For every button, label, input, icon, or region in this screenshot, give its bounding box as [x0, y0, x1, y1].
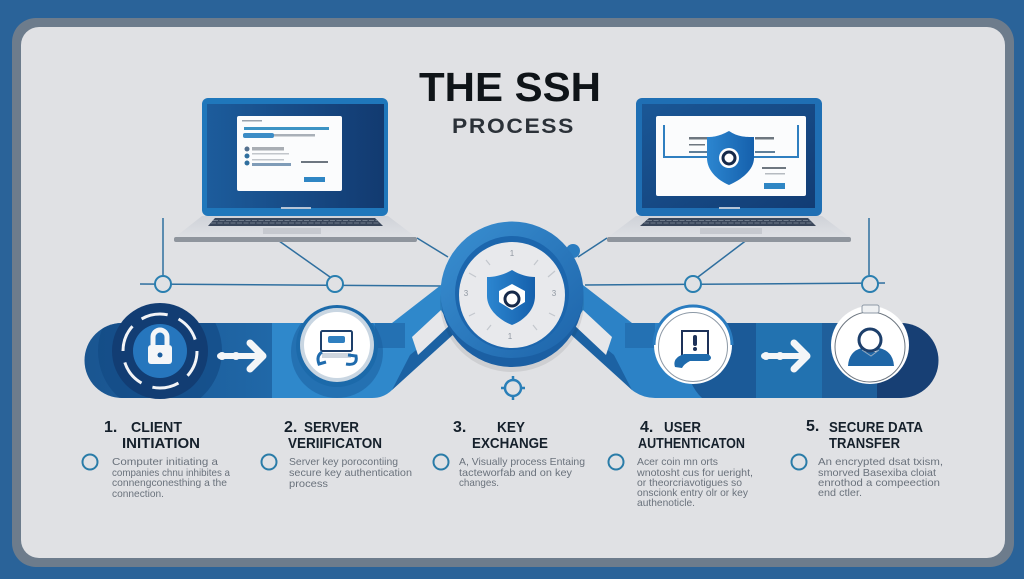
step 1 text: 1.: [104, 419, 117, 436]
connector nodes: [155, 276, 878, 292]
title: THE SSH: [419, 64, 601, 110]
step 1 icon: padlock: [112, 303, 208, 399]
step 3 text: 3.: [453, 419, 466, 436]
step 4 icon: alert badge: [654, 306, 732, 384]
step 4 text: authenoticle.: [637, 497, 695, 509]
central clock: 1: [510, 249, 515, 258]
step 2 text: [262, 419, 412, 490]
icon: arrow: [764, 343, 807, 369]
step 3 text: changes.: [459, 477, 499, 489]
step 4 text: onscionk entry olr or key: [637, 487, 749, 499]
central clock: 1: [508, 332, 513, 341]
step 4 text: AUTHENTICATON: [638, 435, 745, 452]
step 1 text: connection.: [112, 488, 164, 500]
step 5 text: TRANSFER: [829, 435, 900, 452]
step 5 text: smorved Basexiba cloiat: [818, 467, 936, 479]
step 1 text: INITIATION: [122, 435, 200, 452]
step 3 text: [434, 419, 585, 489]
central arms: [392, 310, 632, 390]
security dialog: [656, 116, 806, 196]
step 4 text: or theorcriavotigues so: [637, 477, 742, 489]
central clock: [440, 222, 584, 372]
step 4 text: [608, 419, 753, 509]
icon: arrow: [220, 343, 263, 369]
right process bar: [570, 285, 938, 398]
step 4 text: wnotosht cus for ueright,: [636, 467, 753, 479]
step 1 text: companies chnu inhibites a: [112, 467, 230, 479]
lower node: [501, 376, 525, 400]
step 3 text: KEY: [497, 419, 525, 436]
title: [419, 64, 601, 138]
step 1 text: connengconesthing a the: [112, 477, 227, 489]
right laptop: [607, 98, 851, 242]
step 1 text: Computer initiating a: [112, 456, 218, 468]
step 2 text: VERIIFICATON: [288, 435, 382, 452]
step 4 text: Acer coin mn orts: [637, 456, 718, 468]
step 3 text: EXCHANGE: [472, 435, 548, 452]
step 5 text: [792, 418, 943, 499]
step 5 text: An encrypted dsat txism,: [818, 456, 943, 468]
step 5 text: SECURE DATA: [829, 419, 923, 436]
step 3 text: tacteworfab and on key: [459, 467, 573, 479]
left laptop: [174, 98, 417, 242]
step 5 text: 5.: [806, 418, 819, 435]
step 5 text: enrothod a compeection: [818, 477, 940, 489]
step 2 icon: laptop badge: [296, 305, 378, 387]
central clock: 3: [552, 289, 557, 298]
title: PROCESS: [452, 115, 575, 138]
login dialog: [237, 116, 342, 191]
step 2 text: secure key authentication: [289, 467, 412, 479]
step 5 icon: user: [831, 305, 909, 384]
step 4 text: USER: [664, 419, 701, 436]
icon: shield: [707, 131, 754, 185]
step 2 text: Server key porocontiing: [289, 456, 398, 468]
connector lines: [140, 218, 885, 286]
left process bar: [84, 285, 444, 399]
step 3 text: A, Visually process Entaing: [459, 456, 585, 468]
step 2 text: SERVER: [304, 419, 359, 436]
central clock: 3: [464, 289, 469, 298]
step 2 text: 2.: [284, 419, 297, 436]
step 5 text: end ctler.: [818, 487, 862, 499]
step 2 text: process: [289, 478, 328, 490]
icon: shield: [487, 270, 535, 325]
step 1 text: CLIENT: [131, 419, 182, 436]
step 1 text: [82, 419, 230, 500]
arm cutouts: [412, 310, 612, 355]
step 4 text: 4.: [640, 419, 653, 436]
